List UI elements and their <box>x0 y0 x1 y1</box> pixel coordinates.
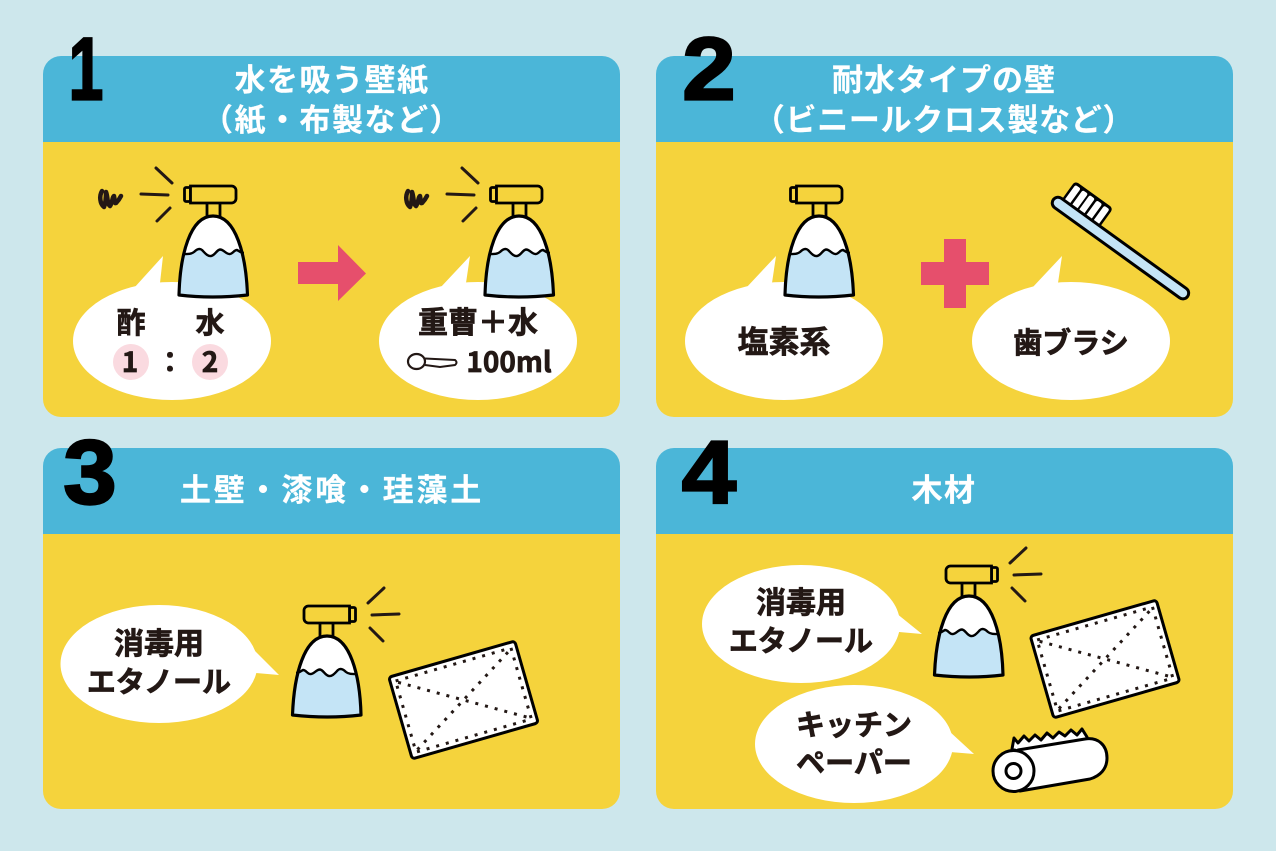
panel 2 heading: （ビニールクロス製など） <box>754 103 1134 138</box>
panel 1 heading: 水を吸う壁紙 <box>234 63 430 98</box>
speech bubble: vinegar and water ratio: 酢 <box>116 307 146 340</box>
panel 2 header <box>656 56 1233 142</box>
panel 1 header <box>43 56 620 142</box>
panel 2 heading <box>754 63 1134 138</box>
speech bubble: disinfectant ethanol: エタノール <box>87 666 231 699</box>
speech bubble: toothbrush: 歯ブラシ <box>1013 326 1129 360</box>
speech bubble: vinegar and water ratio: ： <box>156 341 184 381</box>
icon: spray bottle <box>292 588 399 717</box>
panel 4 body <box>656 534 1233 809</box>
speech bubble: baking soda and water: 重曹＋水 <box>418 307 538 340</box>
speech bubble: chlorine <box>685 256 883 400</box>
icon: spray bottle with vinegar mix <box>100 168 247 297</box>
icon: paper towel roll <box>993 729 1107 792</box>
speech bubble: toothbrush <box>972 256 1170 400</box>
plus sign <box>921 239 989 308</box>
speech bubble: vinegar and water ratio <box>73 256 271 400</box>
panel 4: wood <box>656 422 1233 809</box>
panel 1 heading <box>202 63 462 138</box>
panel 2: water-resistant wall <box>656 19 1233 417</box>
panel 3: earth and plaster walls <box>43 421 620 809</box>
speech bubble: vinegar and water ratio: 水 <box>195 307 225 340</box>
icon: cloth <box>1030 600 1180 718</box>
speech bubble: disinfectant ethanol <box>702 565 922 683</box>
number 2: 2 <box>682 19 736 119</box>
speech bubble: vinegar and water ratio: 2 <box>202 341 218 381</box>
panel 4 heading: 木材 <box>912 473 976 508</box>
speech bubble: kitchen paper: ペーパー <box>796 748 912 780</box>
panel 2 heading: 耐水タイプの壁 <box>832 63 1056 98</box>
panel 4 header <box>656 448 1233 534</box>
speech bubble: disinfectant ethanol: 消毒用 <box>114 628 204 661</box>
speech bubble: disinfectant ethanol: 消毒用 <box>756 587 846 620</box>
arrow <box>298 245 366 301</box>
speech bubble: vinegar and water ratio: 1 <box>122 341 138 381</box>
speech bubble: disinfectant ethanol: エタノール <box>729 625 873 658</box>
speech bubble: baking soda and water: 100ml <box>466 341 552 381</box>
panel 3 heading: 土壁・漆喰・珪藻土 <box>180 473 484 508</box>
panel 3 header <box>43 448 620 534</box>
panel 2 body <box>656 142 1233 417</box>
icon: spray bottle <box>785 186 854 297</box>
panel 3 body <box>43 534 620 809</box>
speech bubble: baking soda and water <box>379 256 577 400</box>
speech bubble: disinfectant ethanol <box>60 605 279 723</box>
number 4: 4 <box>682 422 736 522</box>
speech bubble: kitchen paper <box>755 685 974 803</box>
icon: cloth <box>389 641 538 759</box>
panel 1 body <box>43 142 620 417</box>
icon: toothbrush <box>1058 180 1199 293</box>
icon: spray bottle <box>934 548 1041 677</box>
speech bubble: kitchen paper: キッチン <box>796 710 912 742</box>
panel 1 heading: （紙・布製など） <box>202 103 462 138</box>
number 3: 3 <box>63 421 117 523</box>
speech bubble: chlorine: 塩素系 <box>738 325 830 360</box>
panel 1: paper and cloth wallpaper <box>43 20 620 417</box>
icon: spray bottle with baking soda mix <box>406 168 554 297</box>
number 1: 1 <box>69 20 103 119</box>
